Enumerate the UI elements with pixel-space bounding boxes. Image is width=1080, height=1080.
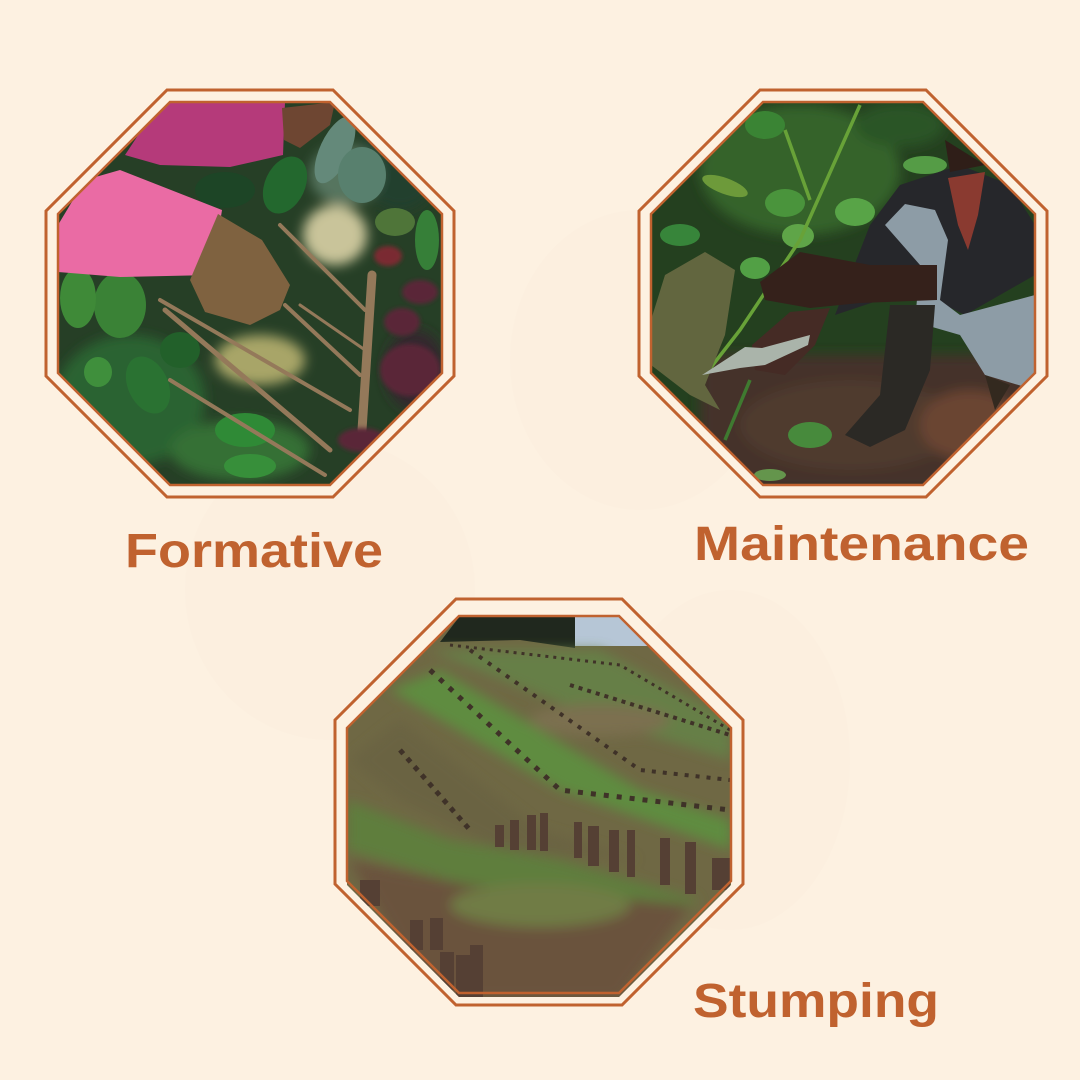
octagon frame	[46, 90, 454, 497]
heading: Maintenance: Maintenance	[694, 518, 1029, 571]
secateurs	[702, 335, 810, 375]
field bands	[430, 650, 731, 760]
panel: Formative	[46, 90, 454, 497]
stump rows	[400, 645, 730, 830]
leaves	[60, 111, 439, 478]
stems	[705, 105, 860, 440]
photo: farmer with secateurs	[651, 102, 1040, 490]
heading: Formative: Formative	[125, 525, 383, 578]
foreground stumps	[360, 813, 730, 997]
heading: Stumping: Stumping	[693, 975, 939, 1028]
branches	[160, 225, 372, 475]
treeline	[440, 616, 575, 648]
hand lower	[752, 308, 830, 364]
leaves	[660, 111, 947, 481]
boot	[845, 305, 935, 447]
watermark: coffee beans	[185, 210, 850, 930]
octagon image border	[651, 102, 1035, 485]
berries	[338, 246, 440, 452]
glove	[190, 214, 290, 325]
red shirt	[948, 172, 985, 250]
panel: Maintenance	[639, 90, 1047, 497]
hand upper	[282, 102, 335, 148]
pink sleeve upper	[125, 102, 285, 167]
rock	[651, 252, 735, 410]
octagon image border	[347, 616, 731, 993]
jacket	[835, 165, 1035, 315]
forearm and hand upper	[760, 252, 937, 308]
boot right	[985, 375, 1010, 410]
photo: stumped coffee field	[347, 616, 731, 1000]
panel: Stumping	[335, 599, 743, 1005]
octagon frame	[639, 90, 1047, 497]
photo: hands pruning coffee branch	[55, 102, 445, 486]
sky	[575, 617, 648, 646]
pink sleeve lower	[58, 170, 222, 277]
head	[945, 140, 985, 172]
octagon image border	[58, 102, 442, 485]
octagon frame	[335, 599, 743, 1005]
jeans	[885, 204, 1035, 390]
